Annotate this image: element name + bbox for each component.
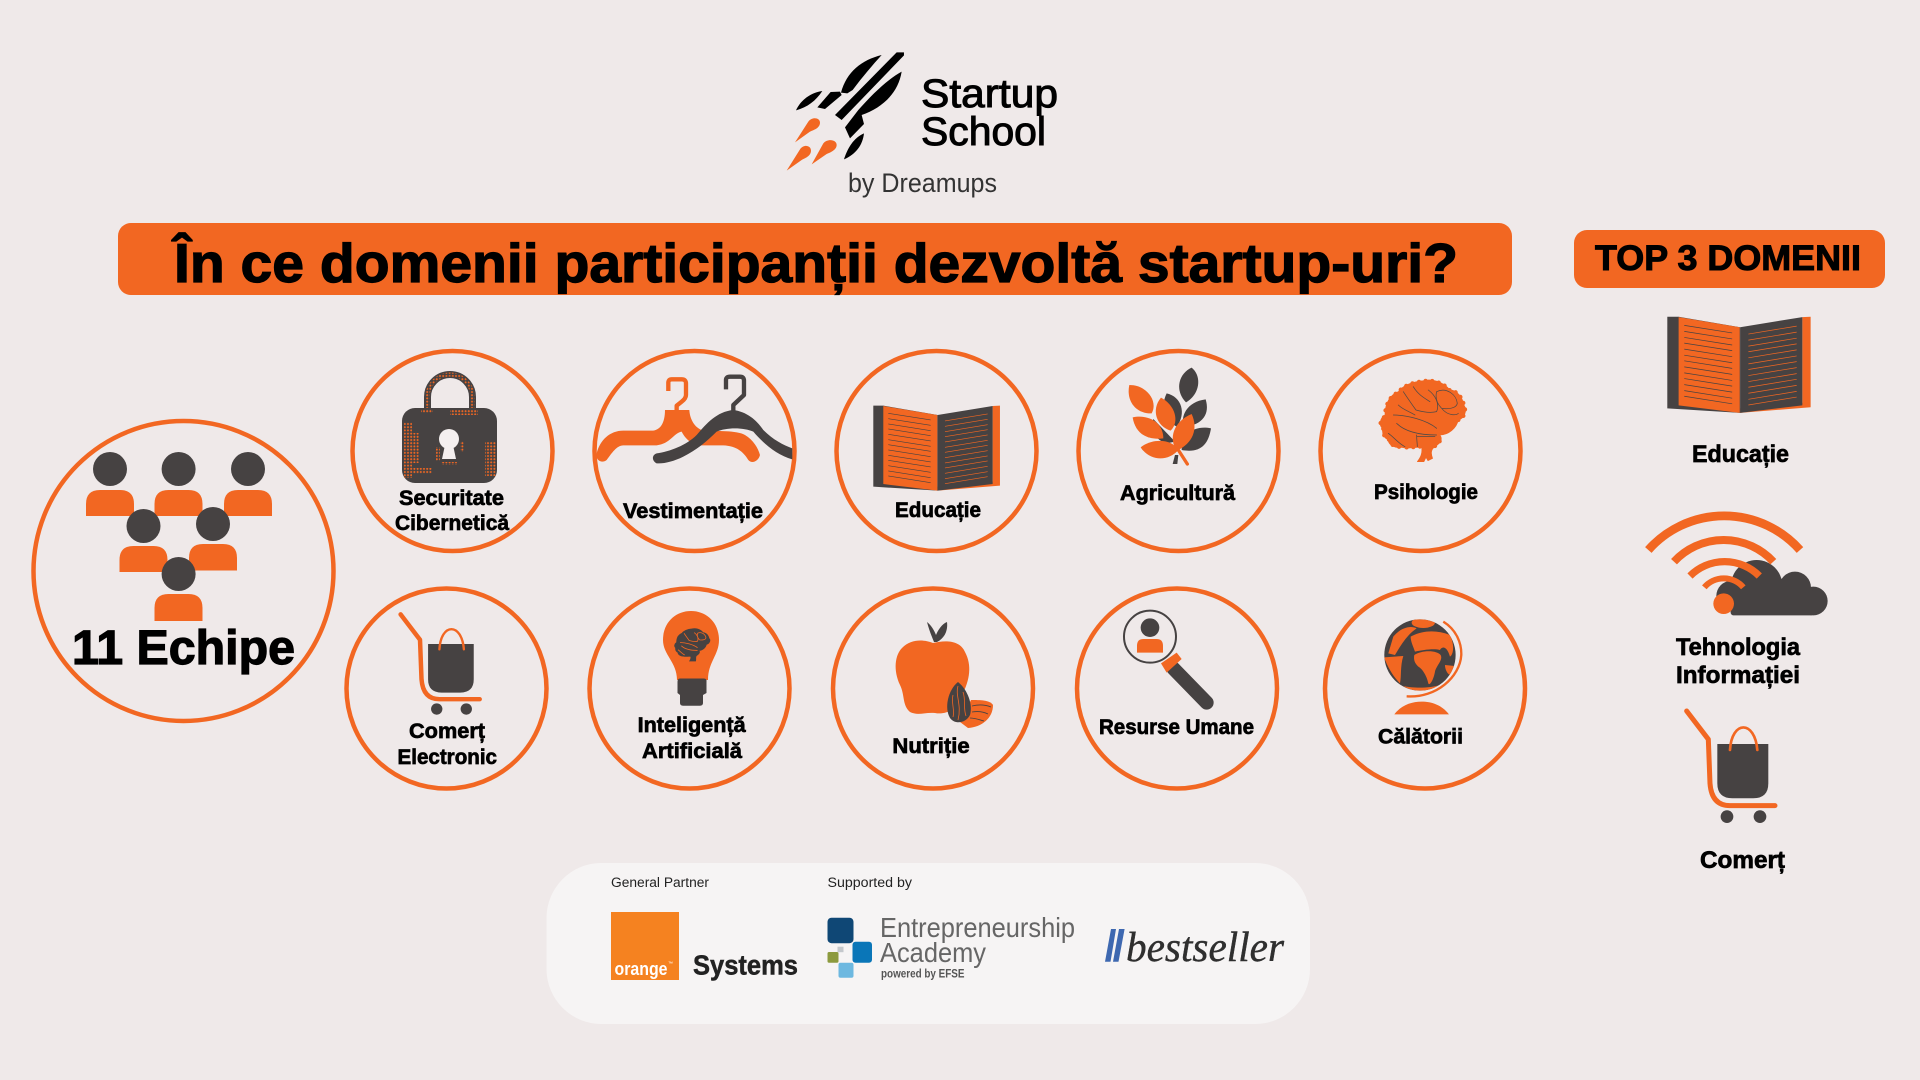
label: Nutriție xyxy=(892,734,970,758)
label: Informației xyxy=(1676,662,1800,689)
title banner: În ce domenii participanții dezvoltă startup-uri? xyxy=(171,232,1458,295)
label xyxy=(395,486,510,535)
logo: Entrepreneurship Academy xyxy=(828,912,1075,980)
logo: Entrepreneurship Academy: Entrepreneurship xyxy=(880,912,1075,943)
panel: Nutriție xyxy=(833,588,1033,788)
heading: TOP 3 DOMENII xyxy=(1574,230,1885,288)
label: Educație xyxy=(895,498,981,522)
item: Comerț xyxy=(1687,711,1785,874)
panel: Securitate Cibernetică xyxy=(352,351,552,551)
icon: wifi and cloud xyxy=(1648,516,1828,615)
text: Supported by: Supported by xyxy=(828,875,912,890)
logo text xyxy=(848,72,1058,198)
label: Cibernetică xyxy=(395,511,510,535)
icon: magnifier with person xyxy=(1124,611,1207,703)
panel: Vestimentație xyxy=(594,351,794,551)
label: Electronic xyxy=(398,745,497,769)
heading: TOP 3 DOMENII: TOP 3 DOMENII xyxy=(1595,239,1861,278)
logo: Orange Systems: orange xyxy=(614,959,668,979)
icon: team of people xyxy=(86,452,272,621)
panel: Educație xyxy=(836,351,1036,551)
label xyxy=(398,719,497,769)
icon: shopping cart xyxy=(401,614,480,715)
label: Artificială xyxy=(642,739,743,763)
logo: Entrepreneurship Academy: powered by EFSE xyxy=(881,968,965,980)
label: Educație xyxy=(1692,441,1789,468)
panel: Agricultură xyxy=(1078,351,1278,551)
label: Psihologie xyxy=(1374,480,1478,504)
panel: Călătorii xyxy=(1325,588,1525,788)
label: Resurse Umane xyxy=(1099,715,1254,739)
logo: bestseller: bestseller xyxy=(1126,925,1285,971)
panel: Resurse Umane xyxy=(1077,588,1277,788)
label: Agricultură xyxy=(1120,481,1236,505)
panel: top 3 domains xyxy=(1574,230,1885,874)
icon: apple and almond xyxy=(896,622,993,728)
logo: Entrepreneurship Academy: Academy xyxy=(880,937,986,968)
logo text: by Dreamups xyxy=(848,168,997,198)
panel: Psihologie xyxy=(1320,351,1520,551)
panel: 11 Echipe xyxy=(34,421,334,721)
logo: Orange Systems xyxy=(611,912,798,980)
icon: rocket xyxy=(787,52,904,171)
icon: open book xyxy=(1667,317,1811,413)
label xyxy=(1676,634,1801,689)
logo text: School xyxy=(921,110,1046,154)
label: Tehnologia xyxy=(1676,634,1801,661)
icon: open book xyxy=(873,406,1000,491)
label: Comerț xyxy=(1700,847,1785,874)
label: Securitate xyxy=(399,486,504,510)
icon: brain xyxy=(1380,380,1465,462)
item: Tehnologia Informației xyxy=(1648,516,1828,689)
panel: partners xyxy=(546,863,1310,1024)
label: 11 Echipe: 11 Echipe xyxy=(72,622,295,675)
logo: Orange Systems: Systems xyxy=(693,949,798,980)
label xyxy=(638,713,747,763)
logo: Startup School by Dreamups xyxy=(787,52,1058,198)
panel: Inteligență Artificială xyxy=(590,588,790,788)
text: General Partner: General Partner xyxy=(611,875,710,890)
icon: light bulb with brain xyxy=(663,611,719,706)
label: Călătorii xyxy=(1378,724,1463,748)
icon: plant branch xyxy=(1129,368,1211,464)
logo: Orange Systems: ™ xyxy=(668,961,673,967)
logo text: Startup xyxy=(921,72,1058,116)
label: Inteligență xyxy=(638,713,747,737)
icon: shopping cart xyxy=(1687,711,1775,823)
label: Comerț xyxy=(409,719,485,743)
item: Educație xyxy=(1667,317,1811,468)
icon: globe xyxy=(1384,617,1461,714)
icon: clothes hangers xyxy=(596,377,792,463)
icon: padlock xyxy=(402,375,497,483)
label: Vestimentație xyxy=(623,499,763,523)
panel: Comerț Electronic xyxy=(346,588,546,788)
